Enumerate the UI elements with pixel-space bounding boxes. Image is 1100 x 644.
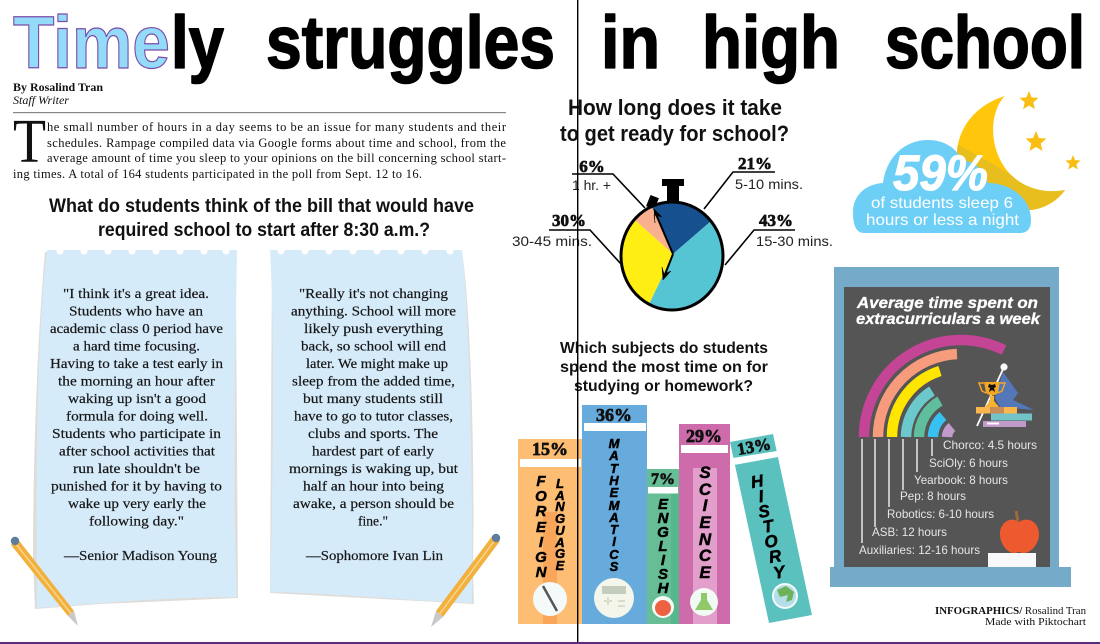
quote text: back, so school will end	[301, 340, 446, 354]
intro text: he small number of hours in a day seems to be an issue for many students and their	[47, 120, 507, 134]
title	[13, 1, 1085, 84]
heading: getting ready: to get ready for school?	[560, 121, 789, 146]
icon: cloud	[853, 140, 1031, 233]
label: 30%: 30-45 mins.	[512, 233, 592, 249]
heading: school start bill: required school to start after 8:30 a.m.?	[98, 220, 430, 241]
book: history: S	[757, 501, 772, 522]
chalkboard title	[856, 295, 1041, 328]
paper scallops	[278, 248, 454, 254]
quote text: likely push everything	[304, 322, 443, 337]
quote text: but many students still	[303, 392, 443, 407]
book: mathematics: A	[608, 510, 619, 525]
book: foreign language: F	[536, 473, 546, 490]
heading: getting ready: How long does it take	[568, 95, 782, 120]
activity labels: Yearbook: 8 hours	[914, 473, 1008, 487]
book: history: I	[757, 487, 766, 506]
paper scallops	[56, 248, 230, 254]
quote text	[289, 287, 458, 564]
pie slices	[622, 204, 722, 308]
quote text: "Really it's not changing	[299, 287, 448, 302]
quote text: academic class 0 period have	[50, 322, 223, 337]
book: english: G	[657, 524, 669, 541]
book: foreign language: A	[554, 535, 565, 550]
book: foreign language: E	[556, 558, 565, 573]
credits	[935, 606, 1087, 628]
chart: books subject percentages	[518, 405, 812, 624]
quote text: waking up isn't a good	[68, 392, 206, 407]
heading: subjects: Which subjects do students	[560, 340, 768, 357]
intro text: T	[13, 108, 46, 176]
book: foreign language	[518, 439, 582, 624]
intro text: ing times. A total of 164 students participated in the poll from Sept. 12 to 16.	[13, 167, 422, 181]
label: 6%	[572, 157, 645, 208]
book: science: S	[699, 463, 711, 482]
quote text: following day."	[89, 514, 184, 530]
clock hands	[654, 209, 673, 280]
icon: trophy flag and books	[976, 363, 1034, 427]
heading: subjects: studying or homework?	[574, 378, 753, 395]
label: 43%	[725, 211, 833, 265]
book: history: T	[761, 516, 776, 537]
book: foreign language: G	[555, 546, 565, 561]
book: mathematics: E	[610, 485, 619, 500]
book: science: I	[703, 496, 709, 515]
quote text	[50, 287, 223, 564]
book: foreign language: L	[556, 476, 564, 491]
quote text: wake up very early the	[68, 497, 206, 512]
activity labels: Pep: 8 hours	[900, 489, 966, 503]
quote text: run late shouldn't be	[73, 462, 200, 477]
book: english: I	[661, 552, 666, 569]
quote text: formula for doing well.	[66, 410, 208, 424]
book: english: H	[658, 580, 670, 597]
label: 6%: 6%	[579, 157, 605, 176]
credits: INFOGRAPHICS/ Rosalind Tran	[935, 606, 1087, 617]
sleep text	[866, 145, 1020, 229]
chalkboard title: Average time spent on	[856, 295, 1038, 312]
activity labels: Chorco: 4.5 hours	[943, 438, 1037, 452]
quote text: Students who participate in	[52, 427, 221, 442]
book: science: E	[699, 513, 711, 532]
quote text: Having to take a test early in	[50, 357, 223, 372]
label: 43%: 43%	[759, 211, 793, 230]
book: mathematics: M	[609, 498, 621, 513]
book: mathematics: S	[610, 559, 619, 574]
heading: school start bill	[49, 196, 474, 241]
book: foreign language: 15%	[532, 439, 568, 459]
icon: apple on box	[988, 511, 1039, 567]
quote text: awake, a person should be	[293, 497, 454, 512]
panel: note sophomore quote	[270, 248, 500, 627]
chart: stopwatch pie	[620, 179, 724, 312]
panel: note senior quote	[11, 248, 238, 626]
quote text: fine."	[358, 514, 388, 530]
heading: getting ready	[560, 95, 789, 146]
activity labels: Auxiliaries: 12-16 hours	[859, 543, 980, 557]
book: english: S	[658, 566, 668, 583]
heading: subjects	[560, 340, 768, 395]
quote text: a hard time focusing.	[73, 340, 200, 354]
stopwatch top	[646, 179, 684, 209]
book: history: 13%	[736, 434, 772, 459]
book: mathematics: 36%	[596, 405, 632, 425]
icon: pencil	[11, 537, 78, 626]
quote text: later. We might make up	[306, 357, 448, 372]
label: 30%	[512, 211, 621, 264]
quote text: hardest part of early	[312, 444, 434, 460]
rainbow leaders	[862, 439, 932, 543]
quote text: half an hour into being	[303, 480, 444, 494]
intro text: schedules. Rampage compiled data via Google forms about time and school, from the	[47, 136, 506, 150]
icon: crescent moon	[956, 96, 1065, 210]
book: english: 7%	[651, 471, 675, 488]
book: science: C	[699, 480, 712, 499]
book: mathematics	[582, 405, 647, 624]
book: science: N	[699, 530, 712, 549]
book: history: O	[763, 531, 779, 552]
label: 21%: 21%	[738, 154, 772, 173]
quote text: have to go to tutor classes,	[294, 410, 453, 424]
quote text: mornings is waking up, but	[289, 462, 458, 477]
quote text: clubs and sports. The	[308, 427, 438, 442]
book: foreign language: I	[539, 534, 544, 551]
heading: subjects: spend the most time on for	[560, 359, 768, 376]
callout: sleep statistic	[853, 91, 1081, 233]
book: english	[647, 469, 679, 624]
book: foreign language: G	[555, 511, 565, 526]
activity labels: Robotics: 6-10 hours	[887, 507, 994, 521]
book: mathematics: H	[609, 473, 619, 488]
book: english: E	[658, 496, 669, 513]
book: mathematics: T	[610, 461, 619, 476]
book: english: N	[658, 510, 670, 527]
quote text: the morning an hour after	[58, 374, 215, 390]
quote text: after school activities that	[59, 444, 215, 460]
icon: pencil	[431, 534, 500, 627]
book: science: C	[699, 546, 712, 565]
label: 6%: 1 hr. +	[572, 177, 611, 193]
book: science: 29%	[686, 426, 722, 446]
byline	[13, 80, 103, 107]
book: history: R	[767, 546, 783, 567]
intro text: average amount of time you sleep to your opinions on the bill concerning school start-	[47, 151, 506, 165]
quote text: sleep from the added time,	[292, 374, 455, 390]
title: ly	[171, 1, 224, 84]
book: history: H	[749, 471, 765, 492]
heading: school start bill: What do students think of the bill that would have	[49, 196, 474, 217]
icon: stars	[1020, 91, 1081, 169]
quote text: —Senior Madison Young	[63, 549, 217, 564]
activity labels: ASB: 12 hours	[872, 525, 947, 539]
book: foreign language: A	[554, 488, 565, 503]
book: mathematics: M	[609, 436, 621, 451]
quote text: —Sophomore Ivan Lin	[305, 549, 443, 564]
label: 43%: 15-30 mins.	[756, 233, 833, 249]
label: 21%	[704, 154, 803, 209]
book: science	[679, 424, 730, 624]
book: foreign language: N	[536, 564, 548, 581]
book: science: E	[699, 563, 711, 582]
credits: Made with Piktochart	[985, 617, 1086, 628]
book: foreign language: G	[535, 549, 547, 566]
label: 21%: 5-10 mins.	[735, 176, 803, 192]
book: mathematics: C	[609, 547, 619, 562]
book: foreign language: O	[535, 488, 547, 505]
sleep text: 59%	[893, 145, 988, 201]
sleep text: hours or less a night	[866, 212, 1020, 229]
book: mathematics: A	[608, 448, 619, 463]
quote text: "I think it's a great idea.	[63, 287, 209, 302]
activity labels	[859, 438, 1037, 557]
book: history	[730, 434, 812, 623]
book: foreign language: E	[536, 519, 547, 536]
quote text: Students who have an	[69, 304, 203, 320]
book: mathematics: I	[612, 534, 616, 549]
book: history: Y	[772, 562, 788, 583]
book: foreign language: N	[555, 499, 565, 514]
byline: By Rosalind Tran	[13, 80, 103, 94]
intro text	[13, 108, 507, 181]
title: high	[702, 1, 840, 84]
book: mathematics: T	[610, 522, 619, 537]
rainbow chart	[864, 340, 1004, 437]
title: in	[601, 1, 660, 84]
label: 30%: 30%	[552, 211, 586, 230]
chalkboard title: extracurriculars a week	[856, 311, 1041, 328]
quote text: anything. School will more	[291, 304, 456, 320]
sleep text: of students sleep 6	[871, 195, 1013, 212]
book: foreign language: R	[536, 503, 547, 520]
title: Time	[13, 1, 170, 84]
panel: chalkboard extracurriculars	[830, 267, 1071, 587]
quote text: punished for it by having to	[51, 480, 222, 494]
byline: Staff Writer	[13, 93, 69, 107]
activity labels: SciOly: 6 hours	[929, 456, 1008, 470]
title: struggles	[266, 1, 555, 84]
book: foreign language: U	[555, 523, 565, 538]
book: english: L	[658, 538, 668, 555]
